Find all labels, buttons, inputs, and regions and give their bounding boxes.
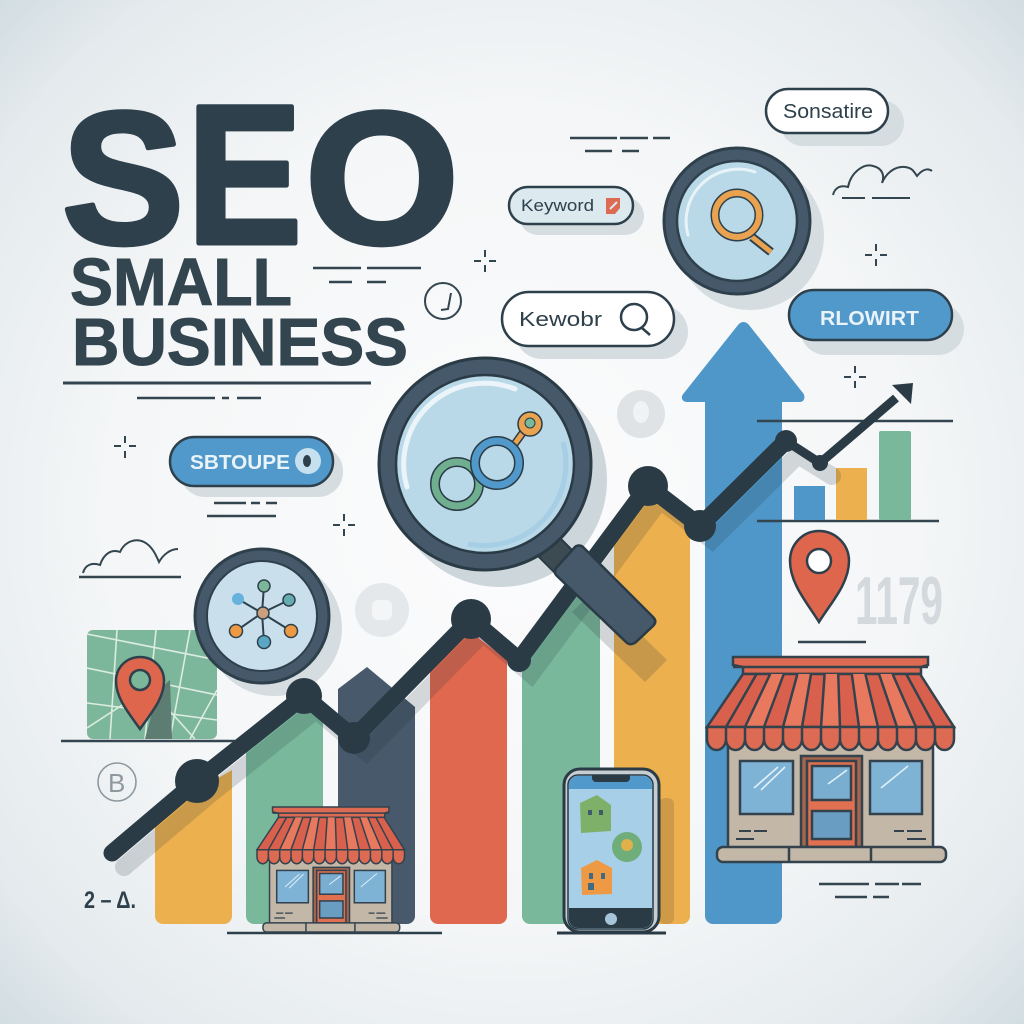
store windows xyxy=(740,761,922,814)
network magnifier xyxy=(195,549,342,696)
map pin: right xyxy=(790,531,849,622)
icon: B badge xyxy=(98,763,136,801)
link icon in lens xyxy=(435,412,542,506)
subtitle: small business: BUSINESS xyxy=(72,305,408,380)
storefront: large xyxy=(707,657,954,862)
pill: RLOWIRT xyxy=(789,290,964,355)
awning xyxy=(707,657,954,750)
title: SEO: E xyxy=(187,64,302,285)
bar chart xyxy=(155,498,690,924)
title: SEO xyxy=(62,64,459,285)
pill: Kewobr search: Kewobr xyxy=(519,309,602,331)
ghost icon: left xyxy=(355,583,409,637)
ghost icon: right xyxy=(617,390,665,438)
pill: SBTOUPE: SBTOUPE xyxy=(190,452,290,474)
phone icon: green house xyxy=(580,795,611,833)
label: 2-b: 2 – Δ. xyxy=(84,887,136,914)
store door xyxy=(801,756,862,847)
growth arrow xyxy=(682,322,804,924)
pill: Sonsatire: Sonsatire xyxy=(783,101,873,123)
pill: Kewobr search xyxy=(502,292,688,359)
storefront: small xyxy=(257,807,404,932)
pill: Sonsatire xyxy=(766,89,904,146)
baseline left xyxy=(61,740,237,742)
mini bar chart xyxy=(757,421,953,521)
map with pin xyxy=(87,630,217,739)
magnifier: search icon xyxy=(664,148,824,310)
phone icon: green flower xyxy=(612,832,642,862)
icon: small clock circle xyxy=(425,283,461,319)
cloud: top right xyxy=(833,165,932,198)
sparkles xyxy=(114,244,887,536)
store wall marks xyxy=(736,831,926,839)
title: SEO: S xyxy=(62,73,184,283)
store wall xyxy=(728,740,933,848)
icon: B badge: B xyxy=(108,768,125,798)
phone xyxy=(557,769,674,933)
cloud: left xyxy=(79,540,181,577)
trend line shadow xyxy=(124,455,832,867)
title rule lines xyxy=(63,138,670,516)
store glints xyxy=(754,766,908,790)
pill: SBTOUPE xyxy=(170,437,343,497)
main magnifier xyxy=(379,358,667,682)
faded number: 1179 xyxy=(855,563,943,639)
pill: RLOWIRT: RLOWIRT xyxy=(820,308,919,330)
phone icon: orange house xyxy=(581,860,612,895)
pill: Keyword xyxy=(509,187,644,235)
title: SEO: O xyxy=(305,73,459,283)
trend line with arrow xyxy=(112,383,913,853)
subtitle: small business xyxy=(70,245,408,380)
subtitle: small business: SMALL xyxy=(70,245,292,320)
store base xyxy=(717,847,946,862)
pill: Keyword: Keyword xyxy=(521,196,594,215)
decorative lines near store xyxy=(798,642,921,897)
baseline under small store xyxy=(227,932,442,934)
